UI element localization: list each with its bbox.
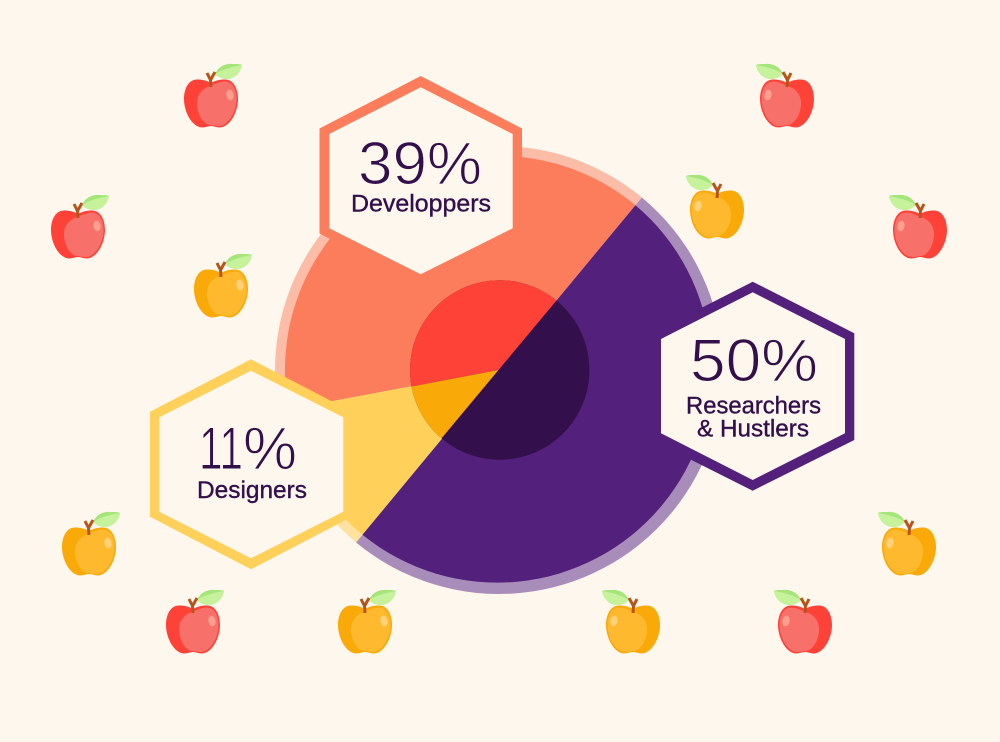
icon: yellow apple inner right: [686, 175, 744, 238]
icon: red apple bottom left: [166, 590, 224, 654]
callout: developers: Developpers: [351, 190, 491, 218]
icon: red apple top right: [756, 64, 814, 128]
callout: designers: Designers: [197, 477, 307, 504]
callout: researchers and hustlers: Researchers: [686, 392, 821, 420]
icon: yellow apple lower right: [878, 512, 936, 576]
donut chart: [275, 146, 723, 600]
segment: designers: [279, 370, 499, 542]
callout: researchers and hustlers: [652, 282, 854, 491]
icon: yellow apple bottom centre left: [338, 590, 396, 654]
callout: designers: [150, 359, 352, 569]
icon: red apple left: [51, 195, 109, 258]
icon: yellow apple bottom centre right: [602, 590, 660, 654]
centre circle: [410, 280, 590, 460]
icon: yellow apple lower left: [62, 512, 120, 576]
icon: yellow apple inner left: [194, 254, 252, 318]
callout: designers: %: [243, 415, 297, 482]
icon: red apple right: [889, 195, 947, 258]
callout: researchers and hustlers: 50%: [690, 327, 818, 394]
callout: researchers and hustlers: & Hustlers: [697, 416, 809, 443]
icon: red apple bottom right: [774, 590, 832, 654]
callout: developers: 39%: [358, 130, 482, 197]
callout: developers: [320, 76, 522, 286]
segment: developers: [275, 146, 642, 411]
segment: researchers and hustlers: [356, 198, 723, 594]
callout: designers: 11: [199, 415, 243, 482]
icon: red apple top left: [184, 64, 242, 128]
